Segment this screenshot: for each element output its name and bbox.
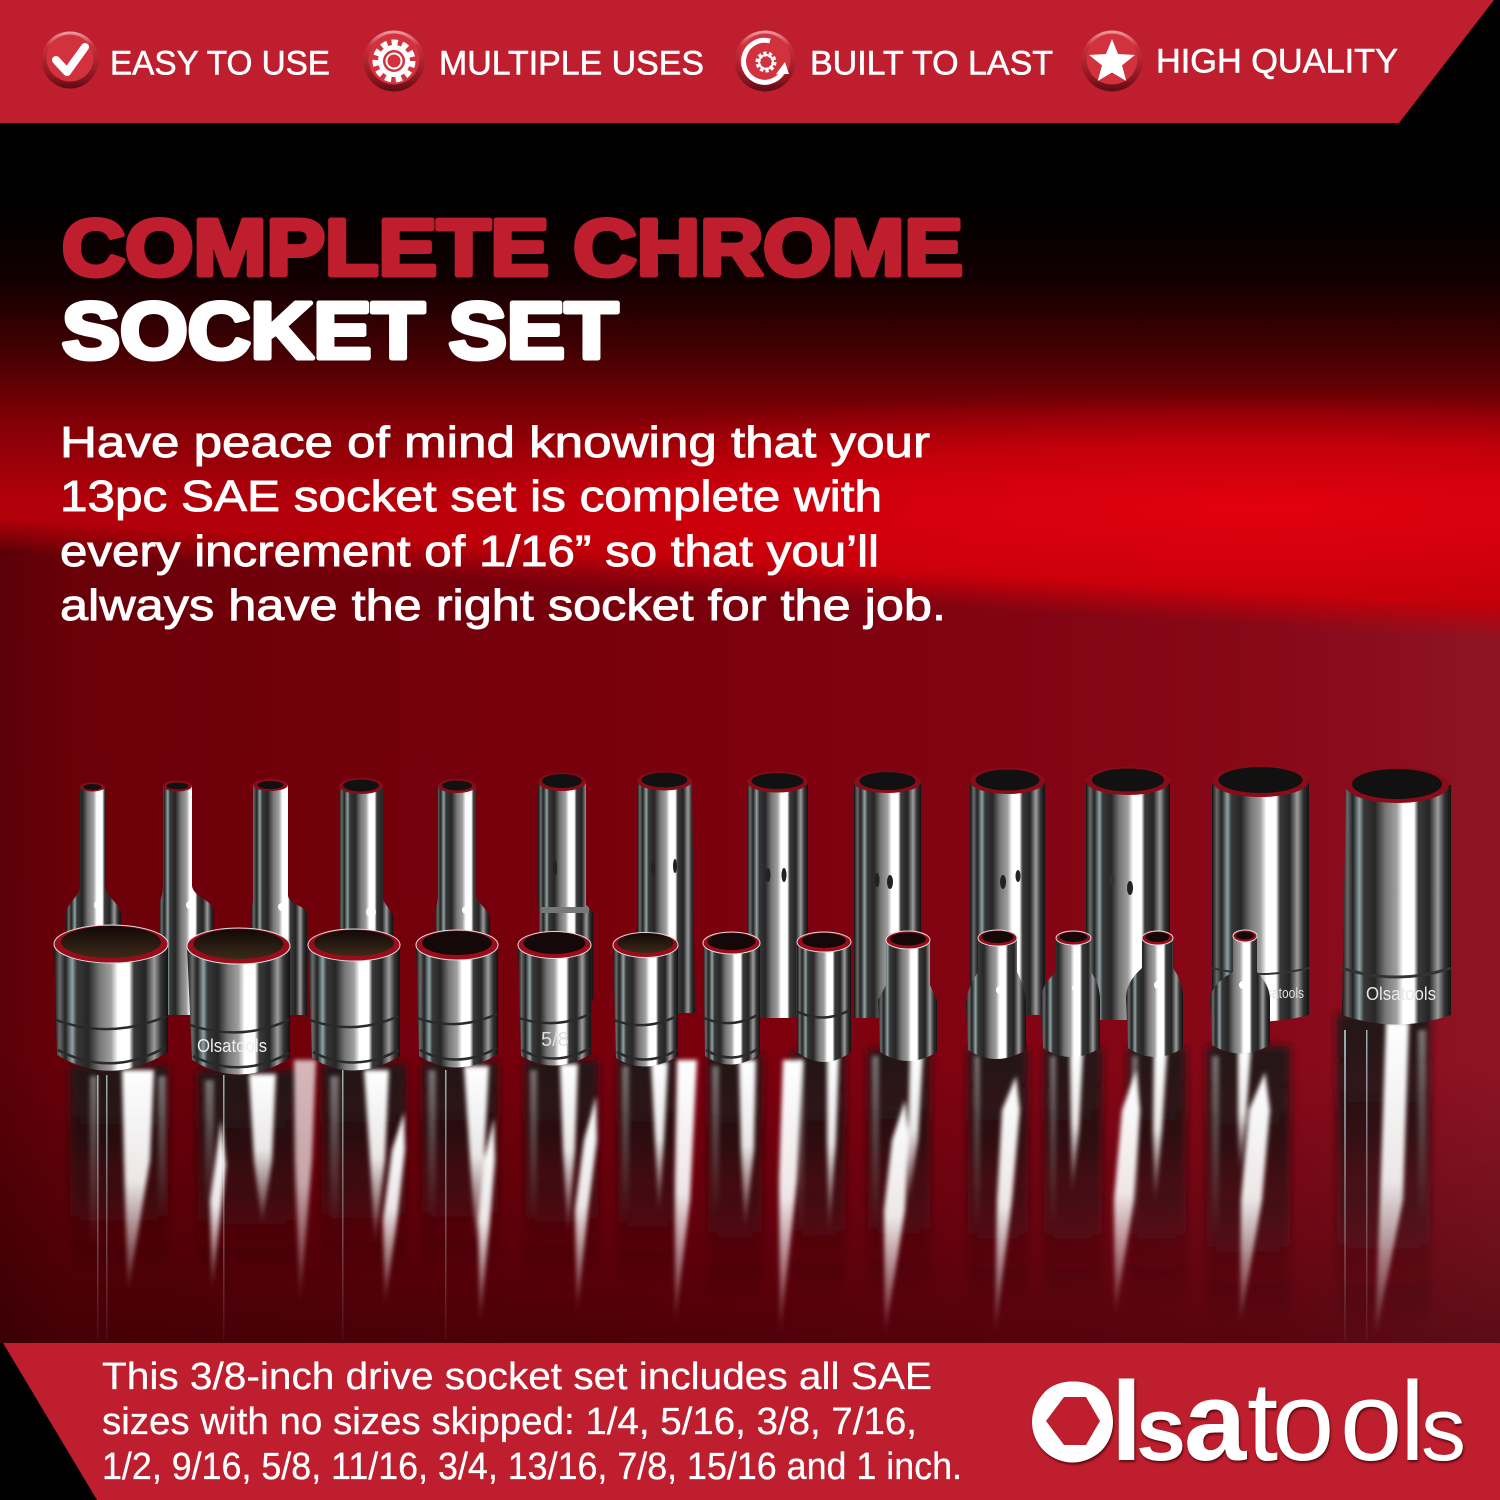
logo: Olsatools: s — [1136, 1380, 1186, 1480]
feature: multiple uses: MULTIPLE USES — [439, 44, 704, 82]
size list text: 1/2, 9/16, 5/8, 11/16, 3/4, 13/16, 7/8, 15/16 and 1 inch. — [102, 1446, 962, 1488]
background: black to red studio backdrop — [0, 236, 1500, 1343]
title: COMPLETE CHROME — [62, 203, 963, 292]
deep socket 10 — [970, 768, 1045, 1015]
deep socket 1 — [66, 782, 121, 940]
size list text: This 3/8-inch drive socket set includes all SAE — [102, 1356, 932, 1398]
title: SOCKET SET — [62, 286, 618, 375]
short socket 11 — [1041, 931, 1100, 1057]
feature: built to last: BUILT TO LAST — [810, 44, 1053, 82]
feature: multiple uses — [364, 30, 704, 92]
description paragraph — [60, 418, 946, 630]
short socket 5 — [518, 932, 591, 1066]
logo: Olsatools: o — [1340, 1359, 1402, 1484]
deep socket 3 — [251, 779, 307, 1015]
top banner — [0, 0, 1494, 123]
deep sockets, back row — [66, 765, 1451, 1024]
short socket 9 — [878, 931, 937, 1061]
description paragraph: 13pc SAE socket set is complete with — [60, 472, 882, 521]
logo: Olsatools: l — [1400, 1359, 1425, 1484]
description paragraph: always have the right socket for the job. — [60, 581, 946, 630]
title — [62, 203, 963, 375]
short socket 13 — [1210, 930, 1270, 1054]
description paragraph: every increment of 1/16” so that you’ll — [60, 527, 879, 576]
deep socket 6 — [538, 773, 593, 1000]
deep socket 7 — [637, 772, 695, 1013]
feature: easy to use — [42, 32, 330, 88]
deep socket 5 — [435, 779, 490, 945]
deep socket 4 — [339, 778, 393, 945]
icon: cycle gear — [734, 30, 796, 92]
feature: easy to use: EASY TO USE — [110, 44, 330, 82]
short socket 2: Olsatools — [197, 1036, 267, 1056]
icon: star — [1082, 30, 1142, 92]
feature: high quality — [1082, 30, 1398, 92]
short socket 3 — [308, 929, 400, 1071]
deep socket 12 — [1212, 765, 1309, 1022]
logo: Olsatools: l — [1111, 1359, 1142, 1484]
feature: built to last — [734, 30, 1053, 92]
socket reflections on the polished surface — [70, 1014, 1430, 1340]
short socket 2 — [187, 928, 290, 1075]
deep socket 13: Olsatools — [1366, 984, 1436, 1004]
short socket 5: 5/8 — [541, 1029, 569, 1051]
logo: Olsatools: s — [1421, 1380, 1466, 1480]
logo: Olsatools: O — [1030, 1359, 1117, 1484]
deep socket 9 — [854, 771, 921, 1018]
icon: check mark — [42, 32, 98, 88]
deep socket 11 — [1086, 767, 1170, 1020]
feature: high quality: HIGH QUALITY — [1156, 42, 1398, 80]
short socket 10 — [966, 930, 1026, 1059]
size list text — [102, 1356, 962, 1488]
deep socket 12: Olsatools — [1254, 985, 1304, 1002]
short socket 6 — [613, 932, 678, 1067]
logo: Olsatools: o — [1272, 1359, 1334, 1484]
icon: gear — [364, 30, 424, 92]
short socket 1 — [54, 925, 168, 1071]
description paragraph: Have peace of mind knowing that your — [60, 418, 930, 467]
logo: Olsatools: t — [1247, 1359, 1278, 1484]
deep socket 8 — [747, 772, 808, 1018]
short socket 4 — [416, 930, 498, 1068]
short socket 12 — [1126, 931, 1183, 1057]
logo: Olsatools — [1030, 1359, 1466, 1484]
size list text: sizes with no sizes skipped: 1/4, 5/16, 3/8, 7/16, — [102, 1401, 917, 1443]
logo: Olsatools: a — [1184, 1359, 1247, 1484]
short sockets, front row — [54, 925, 1270, 1075]
bottom banner — [0, 1343, 1500, 1500]
short socket 8 — [797, 932, 851, 1062]
deep socket 2 — [159, 780, 214, 1015]
deep socket 13 — [1342, 767, 1451, 1024]
short socket 7 — [703, 932, 760, 1065]
